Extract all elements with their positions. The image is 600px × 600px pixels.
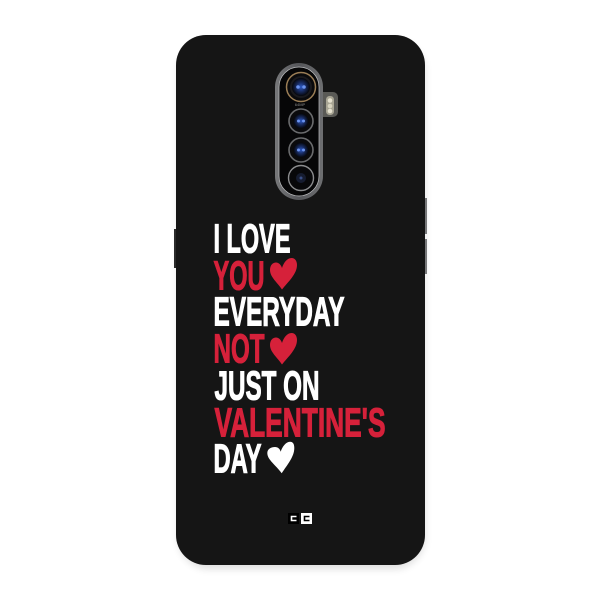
line: DAY: DAY <box>214 436 262 482</box>
icon: red heart <box>270 333 297 364</box>
case shadow <box>178 40 425 569</box>
lens 4 <box>288 166 314 190</box>
line: JUST ON: JUST ON <box>214 362 320 408</box>
line: VALENTINE'S: VALENTINE'S <box>214 400 386 446</box>
right side buttons <box>424 198 427 274</box>
line: EVERYDAY: EVERYDAY <box>214 288 344 334</box>
icon: white heart <box>267 442 294 473</box>
lens 1 <box>286 72 316 102</box>
phone body <box>176 35 425 565</box>
slogan <box>214 216 386 482</box>
line: YOU: YOU <box>214 252 264 298</box>
flash <box>318 92 338 117</box>
camera module <box>275 63 338 200</box>
left side button <box>174 229 177 268</box>
line: I LOVE: I LOVE <box>214 216 290 262</box>
icon: red heart <box>270 258 297 290</box>
brand logo <box>288 513 312 524</box>
line: NOT: NOT <box>214 326 264 372</box>
camera label: 64MP <box>295 102 306 107</box>
lens 3 <box>289 138 313 162</box>
lens 2 <box>289 109 313 133</box>
camera housing <box>275 63 323 200</box>
